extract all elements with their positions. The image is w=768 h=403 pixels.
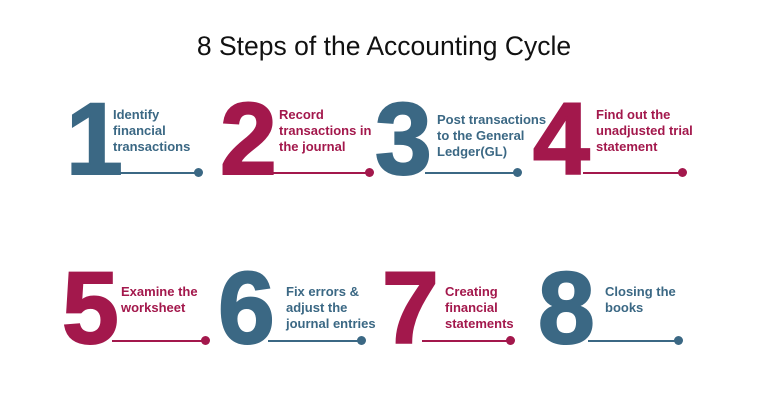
step 1: Identify	[113, 107, 159, 122]
step 6: Fix errors &	[286, 284, 359, 299]
step 3	[375, 82, 546, 196]
step 4: Find out the	[596, 107, 670, 122]
step 2	[220, 82, 374, 196]
step 7: Creating	[445, 284, 498, 299]
step 4: 4	[533, 82, 588, 196]
step 4: unadjusted trial	[596, 123, 693, 138]
step 8: Closing the	[605, 284, 676, 299]
step 1	[66, 82, 203, 196]
step 3: to the General	[437, 128, 524, 143]
step 1: 1	[66, 82, 121, 196]
step 6: adjust the	[286, 300, 347, 315]
step 7: 7	[382, 251, 437, 365]
step 5: 5	[62, 251, 117, 365]
step 2: the journal	[279, 139, 345, 154]
step 7: financial	[445, 300, 498, 315]
step 3: Ledger(GL)	[437, 144, 507, 159]
step 8: 8	[538, 251, 593, 365]
step 5	[62, 251, 210, 365]
step 5: worksheet	[121, 300, 185, 315]
step 6	[218, 251, 376, 365]
step 7: statements	[445, 316, 514, 331]
step 4: statement	[596, 139, 657, 154]
step 3: 3	[375, 82, 430, 196]
step 7	[382, 251, 515, 365]
step 2: 2	[220, 82, 275, 196]
step 1: transactions	[113, 139, 190, 154]
step 2: transactions in	[279, 123, 371, 138]
step 4	[533, 82, 693, 196]
title: 8 Steps of the Accounting Cycle	[197, 31, 571, 61]
step 2: Record	[279, 107, 324, 122]
step 6: 6	[218, 251, 273, 365]
step 5: Examine the	[121, 284, 198, 299]
step 8	[538, 251, 683, 365]
step 6: journal entries	[286, 316, 376, 331]
step 3: Post transactions	[437, 112, 546, 127]
step 1: financial	[113, 123, 166, 138]
step 8: books	[605, 300, 643, 315]
